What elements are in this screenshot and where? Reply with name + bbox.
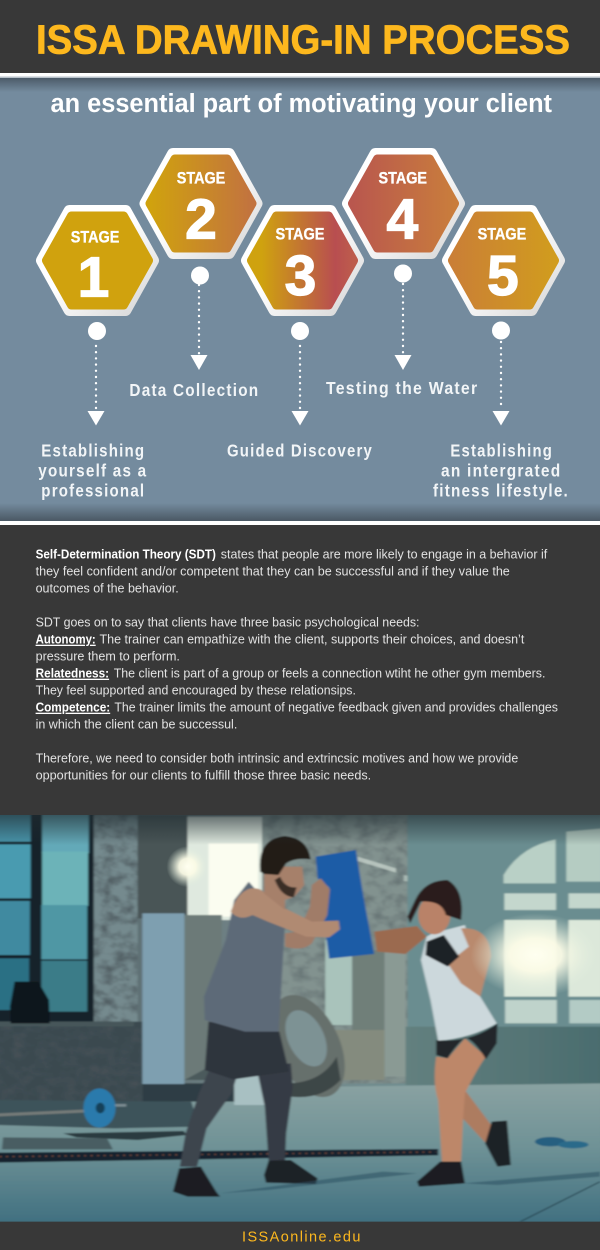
text block: self-determination theory: pressure them to perform. (36, 649, 180, 664)
label: testing the water: Testing the Water (326, 378, 478, 398)
woman rear arm (448, 928, 491, 997)
floor shadows (220, 1172, 417, 1193)
arrow: stage 4 (394, 264, 412, 370)
title: ISSA DRAWING-IN PROCESS (36, 16, 570, 62)
woman back leg (462, 1092, 492, 1143)
text block: self-determination theory: SDT goes on to say that clients have three basic psychological needs: (36, 615, 419, 630)
text block: self-determination theory: outcomes of the behavior. (36, 581, 179, 596)
bright back window (187, 817, 262, 920)
label: data collection: Data Collection (129, 380, 259, 400)
stage 4 hexagon (348, 154, 459, 253)
text block: self-determination theory: The trainer limits the amount of negative feedback given and provides challenges (114, 700, 558, 715)
label: establishing an integrated fitness lifestyle (433, 441, 569, 501)
label: establishing an integrated fitness lifestyle: Establishing (450, 441, 553, 461)
text block: self-determination theory: They feel supported and encouraged by these relationsips. (36, 683, 356, 698)
stage 4 number: 4 (386, 187, 418, 251)
stage 5 number: 5 (487, 244, 519, 308)
woman top (421, 925, 497, 1041)
stage 2 hexagon (146, 154, 256, 253)
text block: self-determination theory: Competence: (36, 700, 110, 715)
text block: self-determination theory: Autonomy: (36, 632, 96, 647)
stage 1 hexagon (42, 211, 153, 310)
label: establishing yourself as a professional: professional (41, 481, 145, 501)
right arched window (504, 828, 600, 1023)
centre wall (262, 813, 408, 1083)
arrow: stage 2 (190, 266, 209, 370)
woman head (418, 896, 450, 934)
arrow: stage 1 (88, 322, 106, 426)
floor (0, 1083, 600, 1225)
man torso (204, 882, 285, 1032)
woman glove (426, 935, 459, 967)
text block: self-determination theory: Relatedness: (36, 666, 109, 681)
stage 4 label: STAGE (378, 169, 427, 187)
arrow: stage 5 (492, 322, 510, 426)
floor crack (520, 1182, 600, 1222)
woman (374, 880, 511, 1187)
stage 5 hexagon (448, 211, 559, 310)
stage 3 label: STAGE (276, 225, 324, 243)
stage 1 number: 1 (78, 246, 109, 310)
battle rope (0, 1149, 438, 1163)
plates on floor (535, 1137, 589, 1148)
stage 3 hexagon (247, 211, 358, 310)
barbell (0, 1088, 126, 1128)
text block: self-determination theory: states that people are more likely to engage in a behavior if (221, 547, 548, 562)
label: guided discovery: Guided Discovery (227, 441, 373, 461)
text block: self-determination theory: Self-Determination Theory (SDT) (36, 547, 216, 562)
stage 2 label: STAGE (177, 169, 225, 187)
arrow: stage 3 (291, 322, 309, 426)
text block: self-determination theory (36, 547, 558, 783)
text block: self-determination theory: Therefore, we need to consider both intrinsic and extrincsic motives and how we provide (36, 751, 518, 766)
woman front leg (435, 1038, 486, 1162)
subtitle: an essential part of motivating your client (50, 90, 553, 118)
label: establishing yourself as a professional (38, 441, 147, 501)
footer url: ISSAonline.edu (242, 1230, 360, 1246)
light beams (356, 856, 409, 882)
man shoes (173, 1167, 220, 1197)
blue pad (316, 850, 374, 959)
woman shorts (436, 1023, 497, 1059)
label: establishing yourself as a professional: yourself as a (38, 461, 147, 481)
text block: self-determination theory: The client is part of a group or feels a connection wtiht he other gym members. (114, 666, 545, 681)
label: establishing an integrated fitness lifestyle: an intergrated (441, 461, 561, 481)
lower left stone wall (0, 1022, 142, 1102)
stage 5 label: STAGE (478, 225, 526, 243)
woman shoes (417, 1162, 465, 1187)
man legs (180, 1072, 237, 1167)
light glows (166, 846, 600, 997)
floor mats (2, 1131, 187, 1149)
photo: trainer and client boxing in gym (0, 812, 600, 1225)
stage 1 label: STAGE (71, 228, 119, 246)
label: establishing an integrated fitness lifestyle: fitness lifestyle. (433, 481, 569, 501)
man (173, 836, 340, 1197)
text block: self-determination theory: they feel confident and/or competent that they can be successful and if they value the (36, 564, 510, 579)
woman front arm (374, 926, 427, 954)
label: establishing yourself as a professional: Establishing (41, 441, 145, 461)
top shading (0, 815, 600, 845)
gym bag (10, 982, 50, 1023)
text block: self-determination theory: The trainer can empathize with the client, supports their choices, and doesn’t (100, 632, 525, 647)
man front arm (231, 888, 340, 937)
left window (0, 812, 95, 1022)
text block: self-determination theory: opportunities for our clients to fulfill those three basic needs. (36, 768, 371, 783)
man back arm (285, 878, 330, 949)
man shorts (205, 1022, 289, 1079)
man neck and head (264, 867, 304, 910)
tyre (278, 994, 346, 1098)
header band (0, 0, 600, 73)
right wall (408, 813, 600, 1030)
text block: self-determination theory: in which the client can be successul. (36, 717, 237, 732)
lockers (142, 913, 222, 1084)
panel: stages (0, 78, 600, 521)
stage 2 number: 2 (185, 187, 217, 251)
stage 3 number: 3 (285, 244, 316, 308)
stone pillar (94, 815, 138, 1027)
